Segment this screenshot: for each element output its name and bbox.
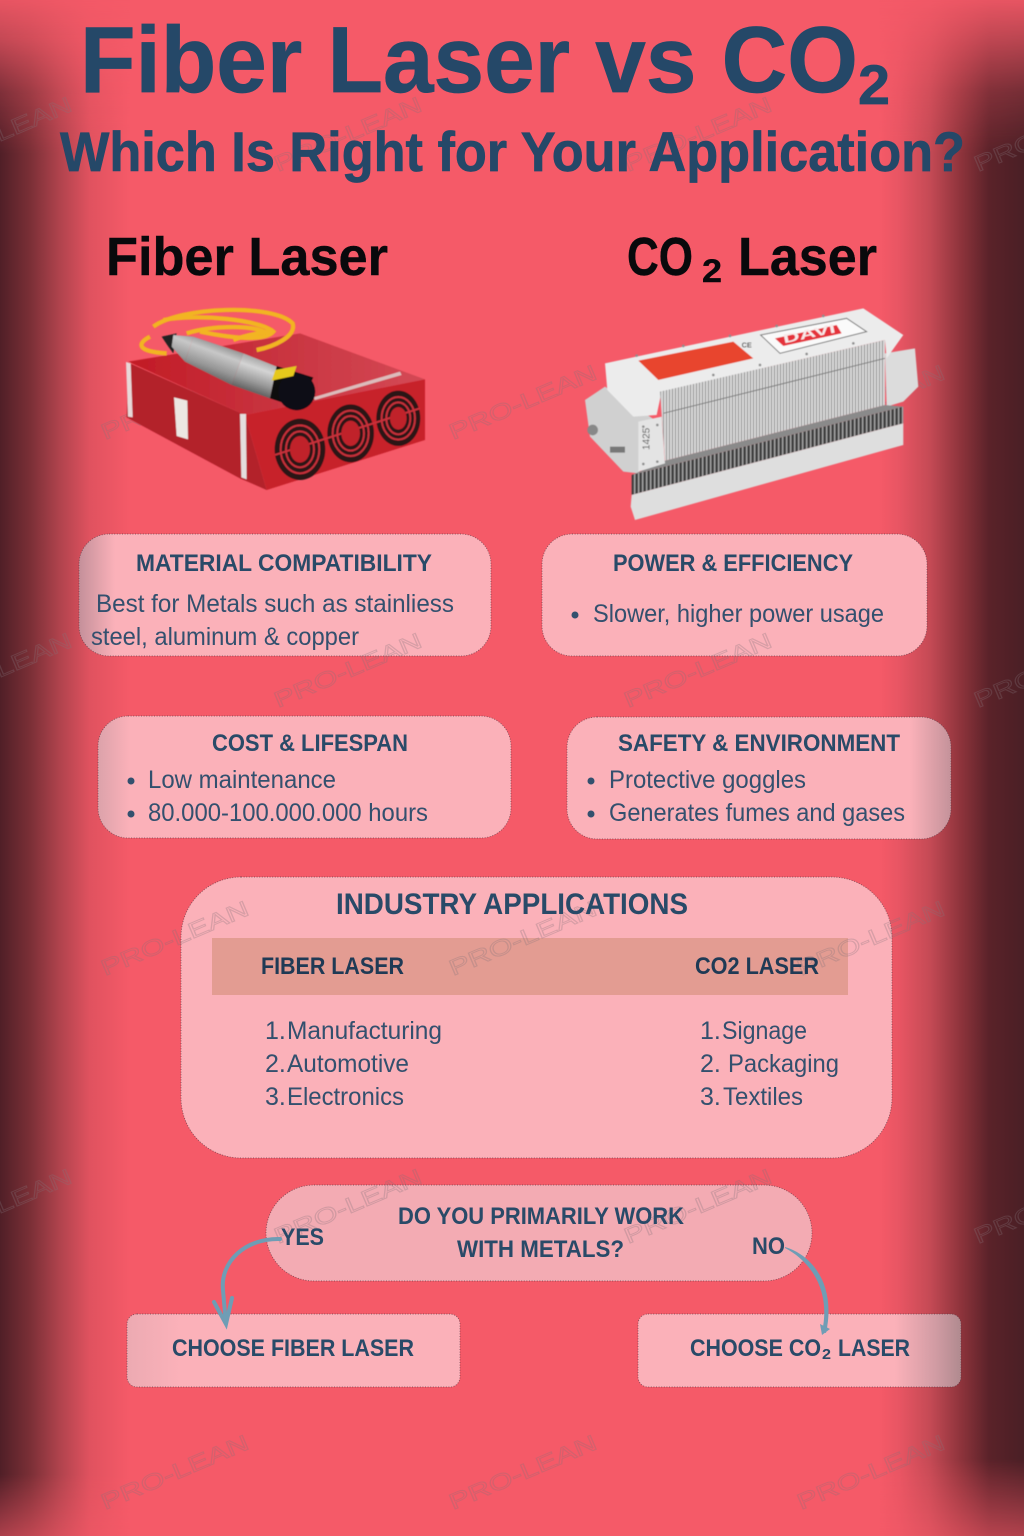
watermark: PRO-LEAN pattern: PRO-LEAN: [793, 1430, 948, 1515]
text: material compatibility: steel, aluminum & copper: [91, 623, 359, 651]
text: choose fiber laser: CHOOSE FIBER LASER: [172, 1335, 414, 1362]
table header band: [212, 938, 848, 995]
text: cost and lifespan: COST & LIFESPAN: [212, 730, 408, 757]
subtitle: Which Is Right for Your Application?: [60, 120, 965, 183]
image: CO2 laser source: DAVI: [782, 321, 837, 346]
list: fiber laser industries: Electronics: [287, 1083, 404, 1111]
text: cost and lifespan: [128, 730, 428, 827]
panel: safety and environment background: [567, 717, 951, 839]
watermark: PRO-LEAN pattern: PRO-LEAN: [620, 92, 775, 177]
list: CO2 laser industries: Textiles: [723, 1083, 803, 1111]
list: fiber laser industries: [265, 1017, 442, 1111]
watermark: PRO-LEAN pattern: PRO-LEAN: [445, 896, 600, 981]
text: safety and environment: Protective goggles: [609, 766, 806, 794]
heading: industry applications: INDUSTRY APPLICATIONS: [336, 888, 688, 921]
list: CO2 laser industries: [700, 1017, 839, 1111]
text: material compatibility: [91, 550, 454, 651]
image: CO2 laser source: 1425: [641, 427, 652, 450]
label: yes: YES: [281, 1224, 324, 1251]
heading: CO2 laser: Laser: [738, 227, 877, 287]
heading: CO2 laser: CO: [627, 227, 693, 287]
text: power and efficiency: POWER & EFFICIENCY: [613, 550, 853, 577]
heading: CO2 laser: [627, 227, 877, 289]
text: cost and lifespan: 80.000-100.000.000 hours: [148, 799, 428, 827]
watermark: PRO-LEAN pattern: PRO-LEAN: [97, 896, 252, 981]
arrow: yes to fiber laser: [214, 1239, 280, 1324]
text: decision question: DO YOU PRIMARILY WORK: [398, 1203, 685, 1230]
watermark: PRO-LEAN pattern: PRO-LEAN: [620, 1164, 775, 1249]
column header: CO2 laser: CO2 LASER: [695, 953, 819, 980]
heading: fiber laser: Fiber Laser: [106, 227, 388, 287]
text: choose CO2 laser: [690, 1335, 910, 1363]
text: safety and environment: [588, 730, 905, 827]
title: Fiber Laser vs CO: [80, 7, 858, 112]
list: fiber laser industries: Manufacturing: [287, 1017, 442, 1045]
label: no: NO: [752, 1233, 785, 1260]
image: CO2 laser source: CE: [742, 340, 752, 349]
watermark: PRO-LEAN pattern: PRO-LEAN: [445, 360, 600, 445]
text: decision question: WITH METALS?: [457, 1236, 624, 1263]
list: CO2 laser industries: Packaging: [728, 1050, 839, 1078]
list: fiber laser industries: 1.: [265, 1017, 286, 1045]
watermark: PRO-LEAN pattern: PRO-LEAN: [620, 628, 775, 713]
arrow: no to CO2 laser: [785, 1247, 830, 1335]
text: safety and environment: SAFETY & ENVIRONMENT: [618, 730, 900, 757]
panel: industry applications background: [181, 877, 892, 1158]
watermark: PRO-LEAN pattern: PRO-LEAN: [97, 1430, 252, 1515]
column header: fiber laser: FIBER LASER: [261, 953, 404, 980]
watermark: PRO-LEAN pattern: PRO-LEAN: [270, 1164, 425, 1249]
list: fiber laser industries: 2.: [265, 1050, 286, 1078]
list: CO2 laser industries: 2.: [700, 1050, 721, 1078]
text: choose CO2 laser: 2: [822, 1346, 831, 1363]
watermark: PRO-LEAN pattern: PRO-LEAN: [793, 896, 948, 981]
panel: choose fiber laser background: [127, 1314, 460, 1387]
text: cost and lifespan: Low maintenance: [148, 766, 336, 794]
list: CO2 laser industries: 1.: [700, 1017, 721, 1045]
text: power and efficiency: Slower, higher power usage: [593, 600, 884, 628]
heading: CO2 laser: 2: [702, 253, 722, 289]
panel: power and efficiency background: [542, 534, 927, 656]
watermark: PRO-LEAN pattern: PRO-LEAN: [793, 360, 948, 445]
panel: material compatibility background: [79, 534, 491, 656]
watermark: PRO-LEAN pattern: PRO-LEAN: [97, 360, 252, 445]
text: decision question: [398, 1203, 685, 1263]
title: 2: [858, 53, 890, 116]
text: material compatibility: MATERIAL COMPATIBILITY: [136, 550, 432, 577]
watermark: PRO-LEAN pattern: PRO-LEAN: [445, 1430, 600, 1515]
text: material compatibility: Best for Metals such as stainliess: [96, 590, 454, 618]
watermark: PRO-LEAN pattern: PRO-LEAN: [270, 92, 425, 177]
list: fiber laser industries: 3.: [265, 1083, 286, 1111]
list: fiber laser industries: Automotive: [287, 1050, 409, 1078]
text: choose CO2 laser: LASER: [838, 1335, 910, 1362]
image: fiber laser source: [126, 310, 425, 490]
panel: decision question background: [266, 1185, 812, 1281]
watermark: PRO-LEAN pattern: PRO-LEAN: [270, 628, 425, 713]
list: CO2 laser industries: 3.: [700, 1083, 721, 1111]
text: choose CO2 laser: CHOOSE CO: [690, 1335, 821, 1362]
panel: cost and lifespan background: [98, 716, 511, 838]
list: CO2 laser industries: Signage: [722, 1017, 807, 1045]
text: safety and environment: Generates fumes and gases: [609, 799, 905, 827]
panel: choose CO2 laser background: [638, 1314, 961, 1387]
image: CO2 laser source: [585, 308, 918, 520]
text: power and efficiency: [572, 550, 884, 628]
